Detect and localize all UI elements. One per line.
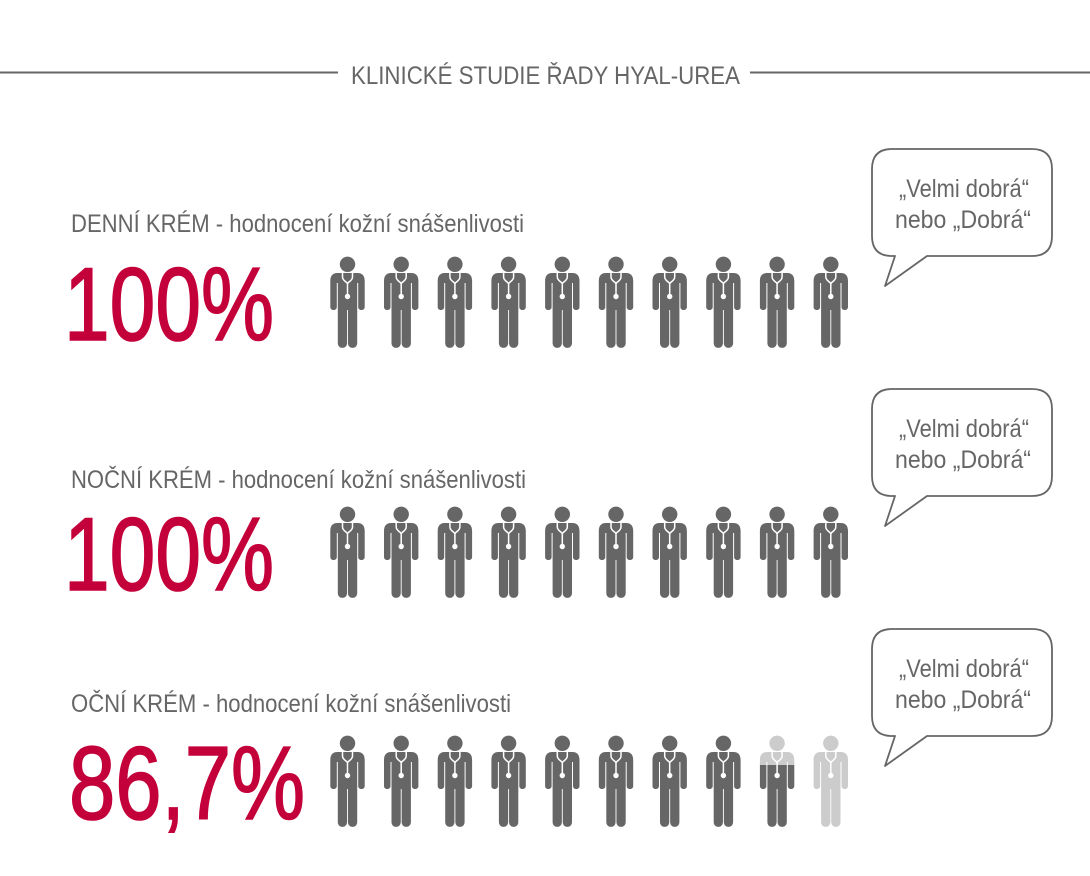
percentage: 86,7%: 86,7% bbox=[69, 726, 305, 842]
speech bubble: „Velmi dobrá“ bbox=[899, 175, 1029, 203]
speech bubble bbox=[872, 149, 1052, 286]
speech bubble: „Velmi dobrá“ bbox=[899, 655, 1029, 683]
speech bubble bbox=[872, 389, 1052, 526]
heading: oční krém: OČNÍ KRÉM - hodnocení kožní snášenlivosti bbox=[71, 689, 511, 718]
heading: noční krém: NOČNÍ KRÉM - hodnocení kožní snášenlivosti bbox=[71, 465, 526, 494]
icons: ten doctors bbox=[330, 507, 848, 598]
title: KLINICKÉ STUDIE ŘADY HYAL-UREA bbox=[351, 61, 740, 90]
panel: noční krém bbox=[64, 389, 1052, 613]
panel: oční krém bbox=[69, 629, 1052, 842]
speech bubble: nebo „Dobrá“ bbox=[895, 446, 1031, 474]
icons: ten doctors bbox=[330, 257, 848, 348]
percentage: 100%: 100% bbox=[64, 247, 274, 363]
icons: ten doctors, partly greyed bbox=[330, 736, 848, 827]
speech bubble: nebo „Dobrá“ bbox=[895, 206, 1031, 234]
speech bubble: „Velmi dobrá“ bbox=[899, 415, 1029, 443]
panel: denní krém bbox=[64, 149, 1052, 363]
speech bubble: nebo „Dobrá“ bbox=[895, 686, 1031, 714]
speech bubble bbox=[872, 629, 1052, 766]
heading: denní krém: DENNÍ KRÉM - hodnocení kožní snášenlivosti bbox=[71, 209, 524, 238]
percentage: 100%: 100% bbox=[64, 497, 274, 613]
